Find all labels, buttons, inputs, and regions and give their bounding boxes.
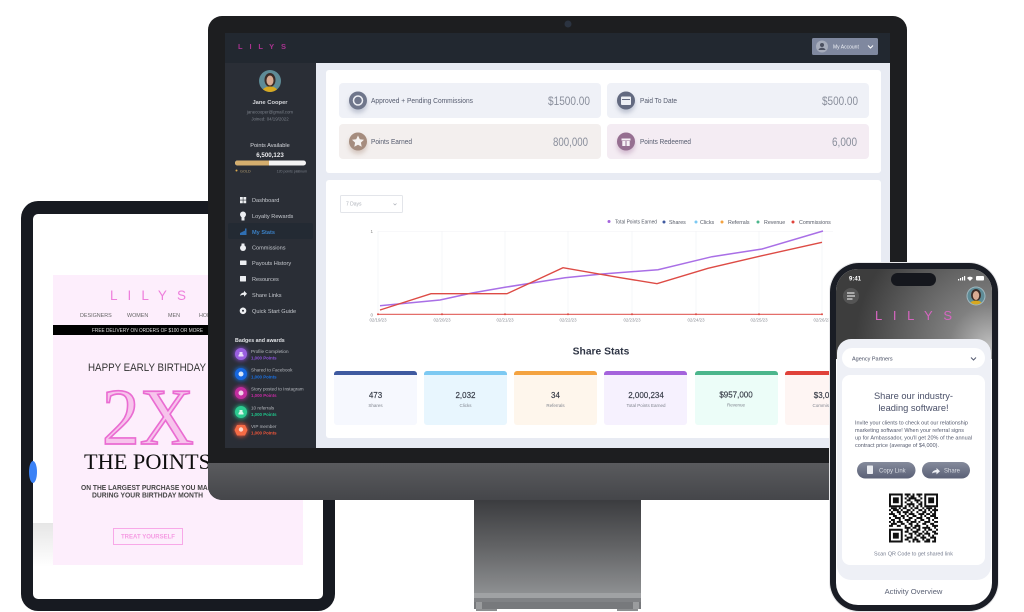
badge: profile completion: 1,000 Points [251,356,277,360]
QR code [889,494,938,542]
agency partners select: Agency Partners [852,356,893,362]
camera [564,20,572,28]
points available: Points Available [250,143,290,149]
share button: Share [944,468,961,474]
copy link button [857,462,916,478]
stat card: shares: Shares [368,403,383,408]
share stats heading: Share Stats [573,346,630,358]
share title [874,391,953,413]
card: paid to date [607,83,869,118]
stat card: referrals [514,371,597,425]
user details [246,100,293,122]
date axis: 02/24/23 [687,318,705,322]
badge: story posted to instagram: 1,000 Points [251,393,277,398]
phone avatar [966,286,986,306]
email greeting: HAPPY EARLY BIRTHDAY [88,362,207,374]
activity overview label: Activity Overview [885,587,943,596]
stat card: total points earned: Total Points Earned [626,403,666,408]
phone header background [836,269,992,359]
stat card: clicks: Clicks [460,403,472,408]
stat card: commissions: $3,000 [814,391,839,400]
email navigation: HOME [199,313,216,319]
email navigation [80,313,216,319]
card: approved and pending commissions [339,83,601,118]
email panel [53,275,303,565]
date axis: 02/23/23 [623,318,641,322]
agency partners select [842,348,985,368]
share title: leading software! [878,403,949,413]
email description: DURING YOUR BIRTHDAY MONTH [92,492,203,500]
email navigation: MEN [168,313,180,319]
delivery banner: FREE DELIVERY ON ORDERS OF $100 OR MORE [92,328,203,334]
card: points earned [339,124,601,159]
user avatar [259,70,281,92]
chart legend: Commissions [799,220,831,226]
chart legend: Shares [669,220,686,226]
date axis: 02/26/23 [813,318,831,322]
badge: referrals: 1,000 Points [251,412,277,417]
share description: up for Ambassador, you'll get 20% of the annual [855,436,972,442]
share description: marketing software! When your referral signs [855,428,964,434]
notch [891,273,936,286]
active nav highlight [228,223,313,239]
badge: vip member [234,424,277,436]
the points headline: THE POINTS [84,449,211,474]
date axis: 02/20/23 [433,318,451,322]
phone edge highlight [829,262,999,612]
tablet [21,201,335,611]
status icons [958,276,984,281]
stat card: clicks [424,371,507,425]
email navigation: WOMEN [127,313,148,319]
navigation menu: Share Links [252,293,282,299]
badge: vip member: 1,000 Points [251,431,277,436]
grey background gradient [33,523,53,567]
stat card: shares: 473 [369,391,383,400]
share card [842,375,985,565]
date range dropdown [340,196,402,212]
account button: My Account [833,44,859,50]
badge: shared to facebook: 1,000 Points [251,374,277,380]
monitor [208,16,907,500]
navigation menu: Payouts History [252,261,291,267]
share title: Share our industry- [874,391,953,401]
stat card: referrals: 34 [551,391,560,400]
stat card: commissions: Commissions [812,403,840,408]
badge: shared to facebook [234,368,293,380]
badge: profile completion: Profile Completion [251,349,289,354]
date axis: 02/25/23 [750,318,768,322]
email description: ON THE LARGEST PURCHASE YOU MAKE [81,485,217,492]
top bar [225,33,890,63]
badge: profile completion [234,348,289,360]
dashboard logo: LILYS [238,42,286,51]
card: approved and pending commissions: Approved + Pending Commissions [371,98,473,105]
main content background [316,63,890,448]
stat card: commissions [785,371,829,425]
card: paid to date: Paid To Date [640,98,677,105]
badge: referrals: 10 referrals [251,405,275,410]
stat card: revenue [695,371,778,425]
email navigation: DESIGNERS [80,313,112,319]
card: points redeemed: 6,000 [832,135,857,149]
user details: Joined: 04/19/2022 [251,116,289,122]
chart legend [608,219,831,226]
stat card: total points earned [604,371,687,425]
email logo: LILYS [110,288,186,303]
phone [829,262,999,612]
navigation menu: My Stats [252,230,275,236]
treat yourself button [114,528,182,544]
stat card: shares [334,371,417,425]
copy link button: Copy Link [879,468,907,474]
stat card: total points earned: 2,000,234 [628,391,664,400]
blue background shape [29,461,37,483]
user details: janecooper@gmail.com [246,110,293,114]
badges heading: Badges and awards [235,338,285,344]
card: points redeemed [607,124,869,159]
share description: Invite your clients to check out our relationship [855,420,968,426]
badge: vip member: VIP member [251,424,277,429]
red series [380,242,822,310]
stat card: clicks: 2,032 [455,391,476,400]
badge: story posted to instagram [234,386,304,400]
chart legend: Total Points Earned [615,219,657,225]
badge: story posted to instagram: Story posted to Instagram [251,386,304,391]
phone content panel [837,339,991,580]
navigation menu [252,198,296,315]
phone body [830,263,998,611]
line chart: 1 [370,229,373,234]
stats panel [326,180,881,438]
line chart [369,229,833,322]
line chart: 0 [370,312,373,318]
date axis: 02/22/23 [559,318,577,322]
baseline series [377,313,823,315]
navigation menu: Resources [252,277,279,283]
share button [922,462,970,478]
QR caption: Scan QR Code to get shared link [874,552,953,558]
monitor chin [208,463,907,500]
monitor bezel [208,16,907,500]
purple series [380,231,823,306]
share description: contract price (average of $4,000). [855,443,939,449]
badge: shared to facebook: Shared to Facebook [251,368,293,372]
date axis: 02/19/23 [369,318,387,322]
points available: 120 points platinum [277,170,307,174]
2X headline: 2X [102,374,194,462]
stat card: referrals: Referrals [546,403,565,408]
monitor stand [474,500,641,611]
navigation menu: Commissions [252,246,286,252]
navigation menu: Quick Start Guide [252,309,296,315]
sidebar [225,63,316,448]
date range dropdown: 7 Days [346,202,362,208]
navigation menu: Dashboard [252,198,279,204]
stat card: revenue: $957,000 [719,390,753,400]
stat card: revenue: Revenue [727,402,746,408]
card: points earned: Points Earned [371,139,412,146]
date axis [369,318,831,322]
card: points redeemed: Points Redeemed [640,139,691,146]
navigation icons [240,197,247,314]
tablet screen [33,214,323,599]
navigation menu: Loyalty Rewards [252,214,294,220]
share description [855,420,972,449]
user details: Jane Cooper [252,100,288,106]
chart legend: Clicks [700,220,714,226]
chart legend: Referrals [728,220,750,226]
treat yourself button: TREAT YOURSELF [121,534,175,540]
phone screen [836,269,992,605]
menu button [843,288,859,304]
date axis: 02/21/23 [496,318,514,322]
points available: 6,500,123 [256,152,284,159]
clock: 9:41 [849,276,862,282]
badge: referrals [234,405,277,418]
chart legend: Revenue [764,220,785,226]
summary panel [326,70,881,173]
card: points earned: 800,000 [553,135,588,149]
delivery banner [53,325,303,335]
points available [235,143,307,174]
tablet frame [21,201,335,611]
phone logo: LILYS [875,308,952,323]
card: paid to date: $500.00 [822,94,858,108]
points available: GOLD [240,170,251,174]
card: approved and pending commissions: $1500.00 [548,94,590,108]
email description [81,485,217,500]
account button [812,38,878,55]
